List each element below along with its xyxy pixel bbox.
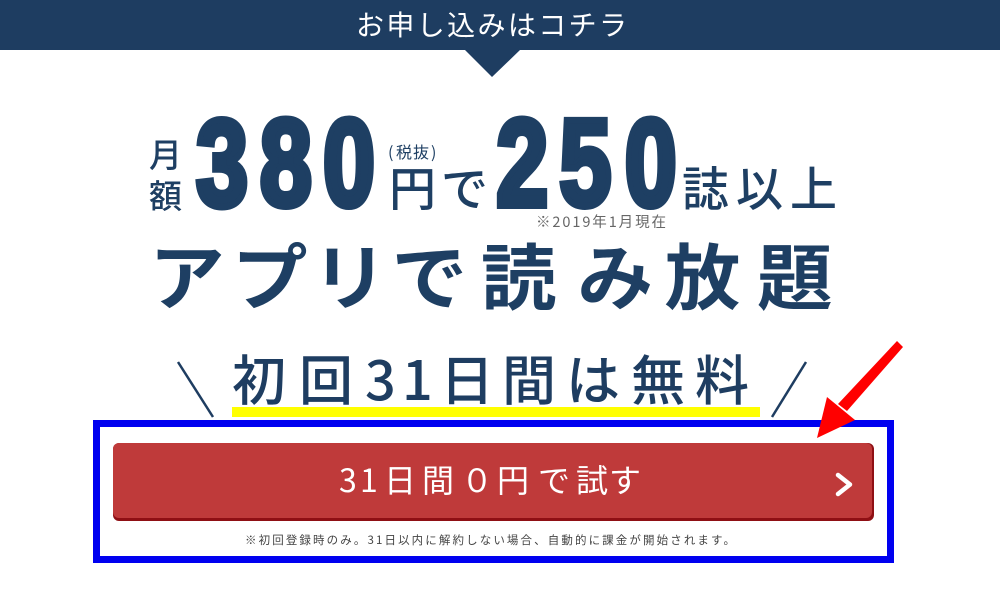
call to action button <box>113 443 874 521</box>
yen and de: で <box>441 151 488 220</box>
header banner: お申し込みはコチラ <box>356 4 627 44</box>
monthly label <box>149 129 182 218</box>
price headline <box>149 95 837 233</box>
free trial text: 初回31日間は無料 <box>232 337 749 416</box>
magazines or more: 誌 <box>682 151 729 220</box>
magazines or more: 以 <box>736 151 783 220</box>
free trial headline <box>178 337 806 417</box>
right slash <box>772 362 806 417</box>
call to action button: 31日間０円で試す <box>339 456 641 502</box>
app reading headline: アプリで読み放題 <box>149 221 833 325</box>
monthly label: 額 <box>149 170 182 218</box>
left slash <box>178 362 213 417</box>
yen and de: 円 <box>389 151 436 220</box>
red arrow <box>817 341 903 438</box>
magazine count: 250 <box>496 95 677 233</box>
disclaimer: ※初回登録時のみ。31日以内に解約しない場合、自動的に課金が開始されます。 <box>245 532 735 548</box>
date note: ※2019年1月現在 <box>536 211 666 232</box>
yen and de <box>389 151 488 220</box>
icon: chevron <box>838 475 850 494</box>
price number: 380 <box>196 95 375 233</box>
magazines or more <box>682 151 837 220</box>
header banner <box>0 0 1000 77</box>
magazines or more: 上 <box>790 151 837 220</box>
blue highlight frame <box>96 424 890 560</box>
monthly label: 月 <box>149 129 182 177</box>
tax note: (税抜) <box>388 139 436 163</box>
yellow underline <box>232 407 760 417</box>
